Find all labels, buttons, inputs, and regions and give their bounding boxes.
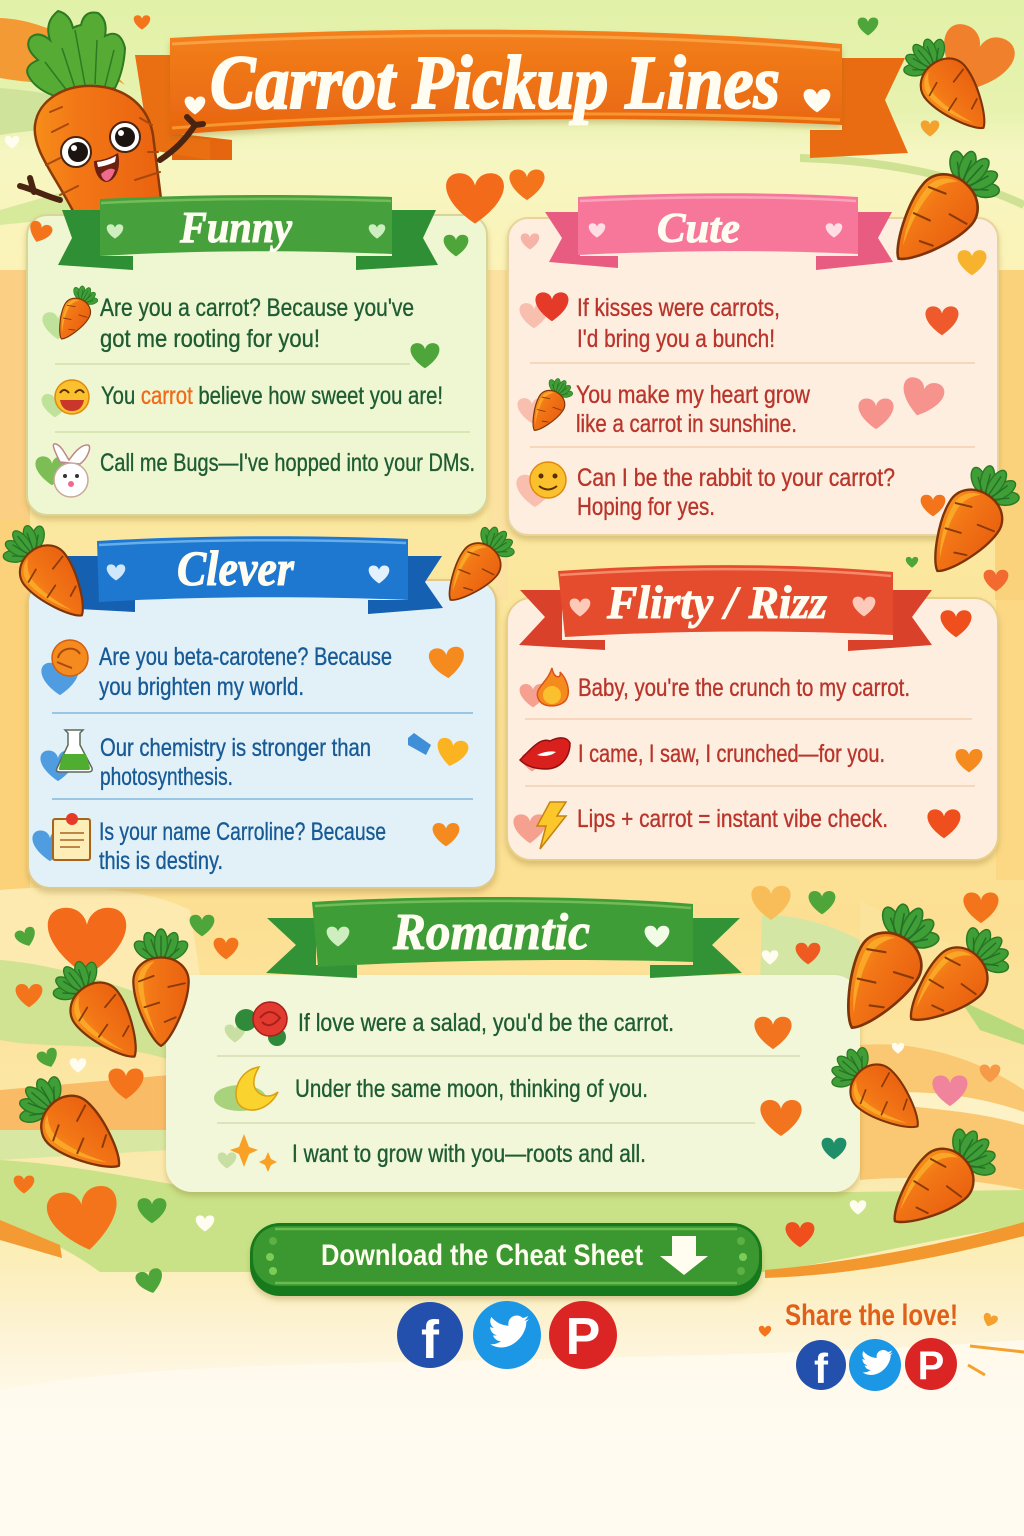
panel: romantic <box>166 897 860 1192</box>
flirty line 3: Lips + carrot = instant vibe check. <box>577 805 888 833</box>
romantic line 2: Under the same moon, thinking of you. <box>295 1075 648 1103</box>
funny line 1: Are you a carrot? Because you've <box>100 294 414 322</box>
romantic line 2 <box>214 1067 802 1136</box>
cute line 2: You make my heart grow <box>576 381 811 409</box>
flirty line 1 <box>520 668 910 707</box>
cute line 3: Hoping for yes. <box>577 493 715 521</box>
romantic line 1 <box>225 1002 792 1049</box>
cute ribbon: Cute <box>657 206 740 252</box>
social icons small: f <box>814 1345 829 1392</box>
funny line 2: You carrot believe how sweet you are! <box>101 382 443 410</box>
flirty ribbon: Flirty / Rizz <box>606 577 828 629</box>
clever line 3: this is destiny. <box>99 847 223 875</box>
clever line 2: Our chemistry is stronger than <box>100 734 371 762</box>
download button: Download the Cheat Sheet <box>321 1239 643 1272</box>
funny ribbon: Funny <box>179 203 292 252</box>
share the love heading: Share the love! <box>785 1299 958 1332</box>
social icons small: P <box>918 1344 944 1388</box>
clever line 2 <box>40 730 469 791</box>
flirty line 2 <box>520 738 982 772</box>
download button <box>250 1223 762 1296</box>
flirty line 1: Baby, you're the crunch to my carrot. <box>578 674 910 702</box>
cute line 3: Can I be the rabbit to your carrot? <box>577 464 895 492</box>
cute line 2: like a carrot in sunshine. <box>576 410 797 438</box>
clever line 3 <box>32 813 459 875</box>
cute line 3 <box>516 462 895 521</box>
funny line 2 <box>42 380 443 417</box>
romantic line 3 <box>218 1134 646 1172</box>
title: Carrot Pickup Lines <box>210 41 780 125</box>
social icons large <box>397 1301 617 1370</box>
clever line 1: Are you beta-carotene? Because <box>99 643 392 671</box>
cute line 1: If kisses were carrots, <box>577 294 780 322</box>
funny line 3: Call me Bugs—I've hopped into your DMs. <box>100 449 475 477</box>
clever ribbon: Clever <box>177 540 294 596</box>
panel: clever <box>28 536 496 888</box>
funny ribbon <box>58 195 438 270</box>
panel: flirty <box>507 565 998 860</box>
romantic ribbon: Romantic <box>392 904 590 961</box>
funny line 3 <box>35 444 475 497</box>
cute line 1: I'd bring you a bunch! <box>577 325 775 353</box>
panel: funny <box>27 195 487 515</box>
clever line 3: Is your name Carroline? Because <box>99 818 386 846</box>
carrots: decorative scatter <box>0 27 1024 1245</box>
funny line 1 <box>43 281 439 368</box>
cute line 2 <box>518 373 946 438</box>
social icons large: P <box>566 1308 600 1366</box>
social icons large: f <box>421 1310 440 1370</box>
flirty ribbon <box>519 565 932 651</box>
social icons small <box>796 1338 1024 1392</box>
cute line 1 <box>520 292 959 353</box>
clever ribbon <box>60 536 443 614</box>
flirty line 2: I came, I saw, I crunched—for you. <box>578 740 885 768</box>
flirty line 3 <box>513 802 961 849</box>
cute ribbon <box>545 193 893 270</box>
funny line 1: got me rooting for you! <box>100 325 320 353</box>
clever line 2: photosynthesis. <box>100 763 233 791</box>
romantic line 1: If love were a salad, you'd be the carrot. <box>298 1009 674 1037</box>
panel: cute <box>508 193 998 535</box>
title ribbon <box>135 30 908 160</box>
clever line 1 <box>41 640 466 701</box>
mascot carrot <box>20 11 203 215</box>
romantic ribbon <box>266 897 742 978</box>
clever line 1: you brighten my world. <box>99 673 304 701</box>
romantic line 3: I want to grow with you—roots and all. <box>292 1140 646 1168</box>
icon: down arrow <box>660 1236 708 1275</box>
